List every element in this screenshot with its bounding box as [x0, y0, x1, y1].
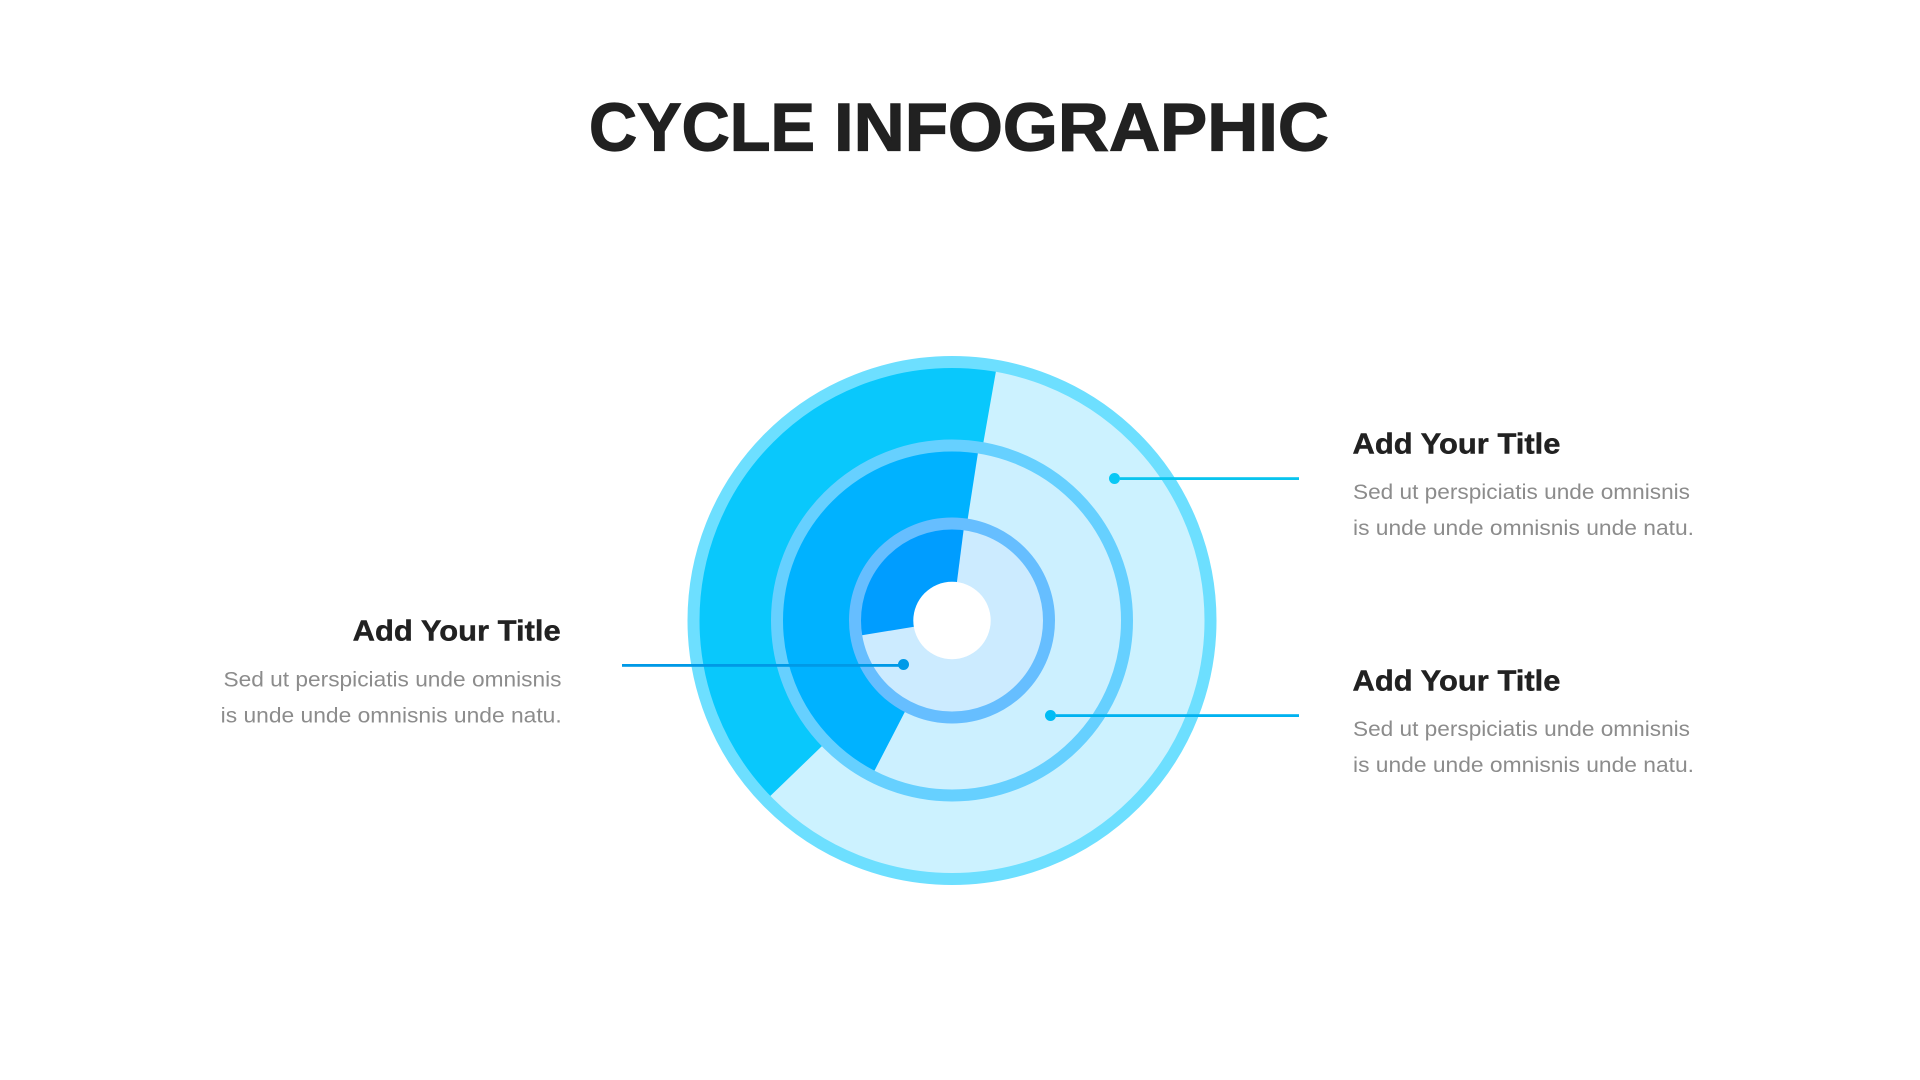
- title: CYCLE: [589, 90, 815, 166]
- text block: left: Sed ut perspiciatis unde omnisnis: [224, 668, 562, 692]
- outer ring: [694, 362, 1210, 879]
- text block: bottom right: Sed ut perspiciatis unde omnisnis: [1353, 717, 1690, 741]
- text block: left: Add Your Title: [353, 616, 561, 648]
- inner ring: [855, 524, 1049, 718]
- text block: left: is unde unde omnisnis unde natu.: [221, 704, 562, 728]
- connector: top right: [1109, 473, 1299, 484]
- title: INFOGRAPHIC: [834, 90, 1329, 166]
- middle ring: [777, 446, 1127, 796]
- text block: top right: [1352, 428, 1694, 540]
- text block: top right: Add Your Title: [1352, 428, 1560, 460]
- connector: left: [622, 659, 909, 670]
- title: [589, 90, 1329, 166]
- text block: left: [221, 616, 562, 728]
- connector: bottom right: [1045, 710, 1299, 721]
- center hole: [913, 582, 991, 659]
- text block: top right: Sed ut perspiciatis unde omnisnis: [1353, 480, 1690, 504]
- chart: concentric cycle rings: [694, 362, 1210, 879]
- text block: bottom right: is unde unde omnisnis unde natu.: [1353, 753, 1694, 777]
- text block: top right: is unde unde omnisnis unde natu.: [1353, 516, 1694, 540]
- text block: bottom right: Add Your Title: [1352, 665, 1560, 697]
- text block: bottom right: [1352, 665, 1694, 777]
